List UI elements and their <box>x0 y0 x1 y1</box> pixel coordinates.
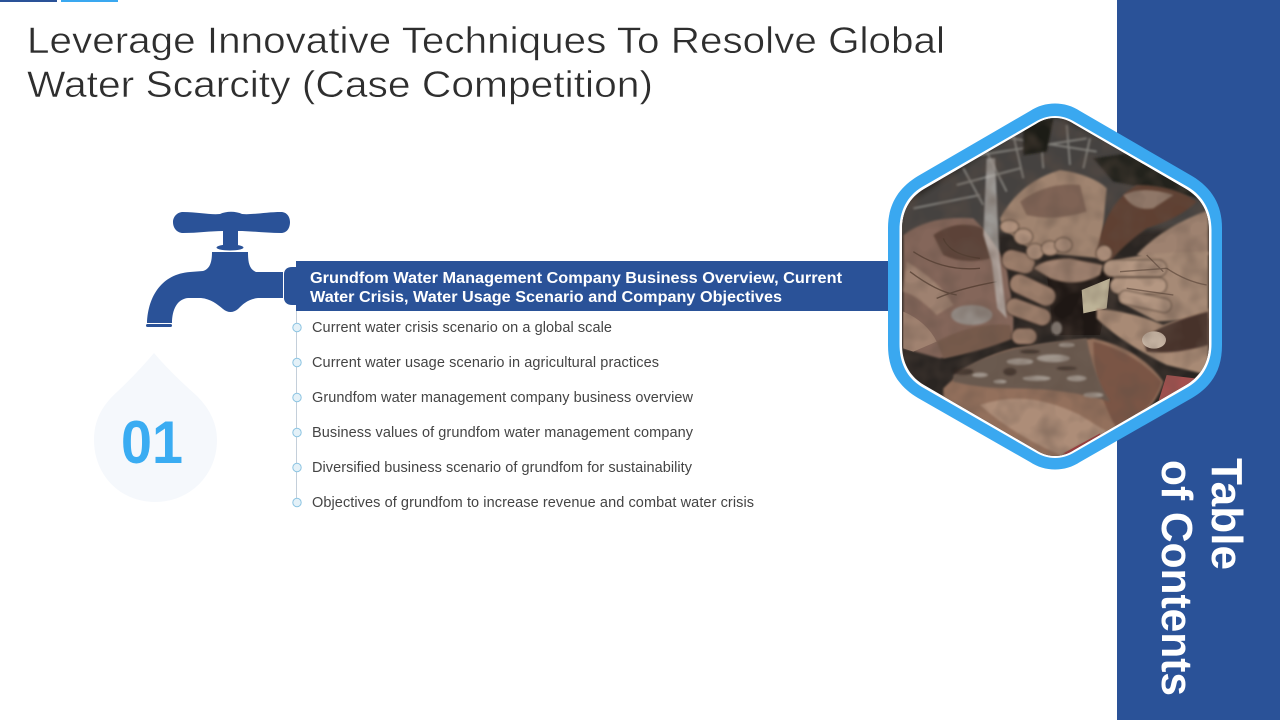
list item 2: Current water usage scenario in agricultural practices <box>312 355 659 371</box>
left hand <box>903 218 1013 358</box>
header banner <box>296 261 890 311</box>
water drop with number <box>94 353 217 502</box>
card scrap <box>1082 278 1110 313</box>
top accent bars <box>0 0 118 2</box>
title: Leverage Innovative Techniques To Resolve Global <box>27 20 945 61</box>
red cloth <box>1064 434 1100 454</box>
list item 1: Current water crisis scenario on a global scale <box>312 320 612 336</box>
water stream <box>983 158 1007 318</box>
banner text <box>310 270 843 306</box>
list item 3: Grundfom water management company business overview <box>312 390 694 406</box>
sidebar heading: table of contents <box>1152 458 1251 696</box>
top hand <box>1000 170 1107 258</box>
sidebar panel <box>1117 0 1280 720</box>
dark gap <box>1047 272 1113 335</box>
photo: cupped hands under water <box>902 118 1209 456</box>
photo grain <box>902 120 1209 456</box>
number 01: 01 <box>121 409 183 476</box>
banner text: Grundfom Water Management Company Business Overview, Current <box>310 270 843 287</box>
sidebar heading: table of contents: of Contents <box>1152 460 1201 696</box>
list item 5: Diversified business scenario of grundfom for sustainability <box>312 460 693 476</box>
right hands <box>1137 210 1208 258</box>
hexagon photo frame <box>888 100 1222 470</box>
water in left palm <box>951 305 992 325</box>
icon: water tap <box>146 212 296 327</box>
left hand fingers <box>1000 248 1059 344</box>
bottom hand <box>943 338 1163 458</box>
banner text: Water Crisis, Water Usage Scenario and Company Objectives <box>310 289 782 306</box>
sidebar heading: table of contents: Table <box>1202 458 1251 570</box>
list item 4: Business values of grundfom water management company <box>312 425 694 441</box>
list item 6: Objectives of grundfom to increase revenue and combat water crisis <box>312 495 754 511</box>
pooled water <box>953 338 1110 402</box>
agenda list <box>293 311 754 511</box>
title: Water Scarcity (Case Competition) <box>27 64 653 105</box>
cloth background <box>900 112 1207 235</box>
title <box>27 20 945 105</box>
